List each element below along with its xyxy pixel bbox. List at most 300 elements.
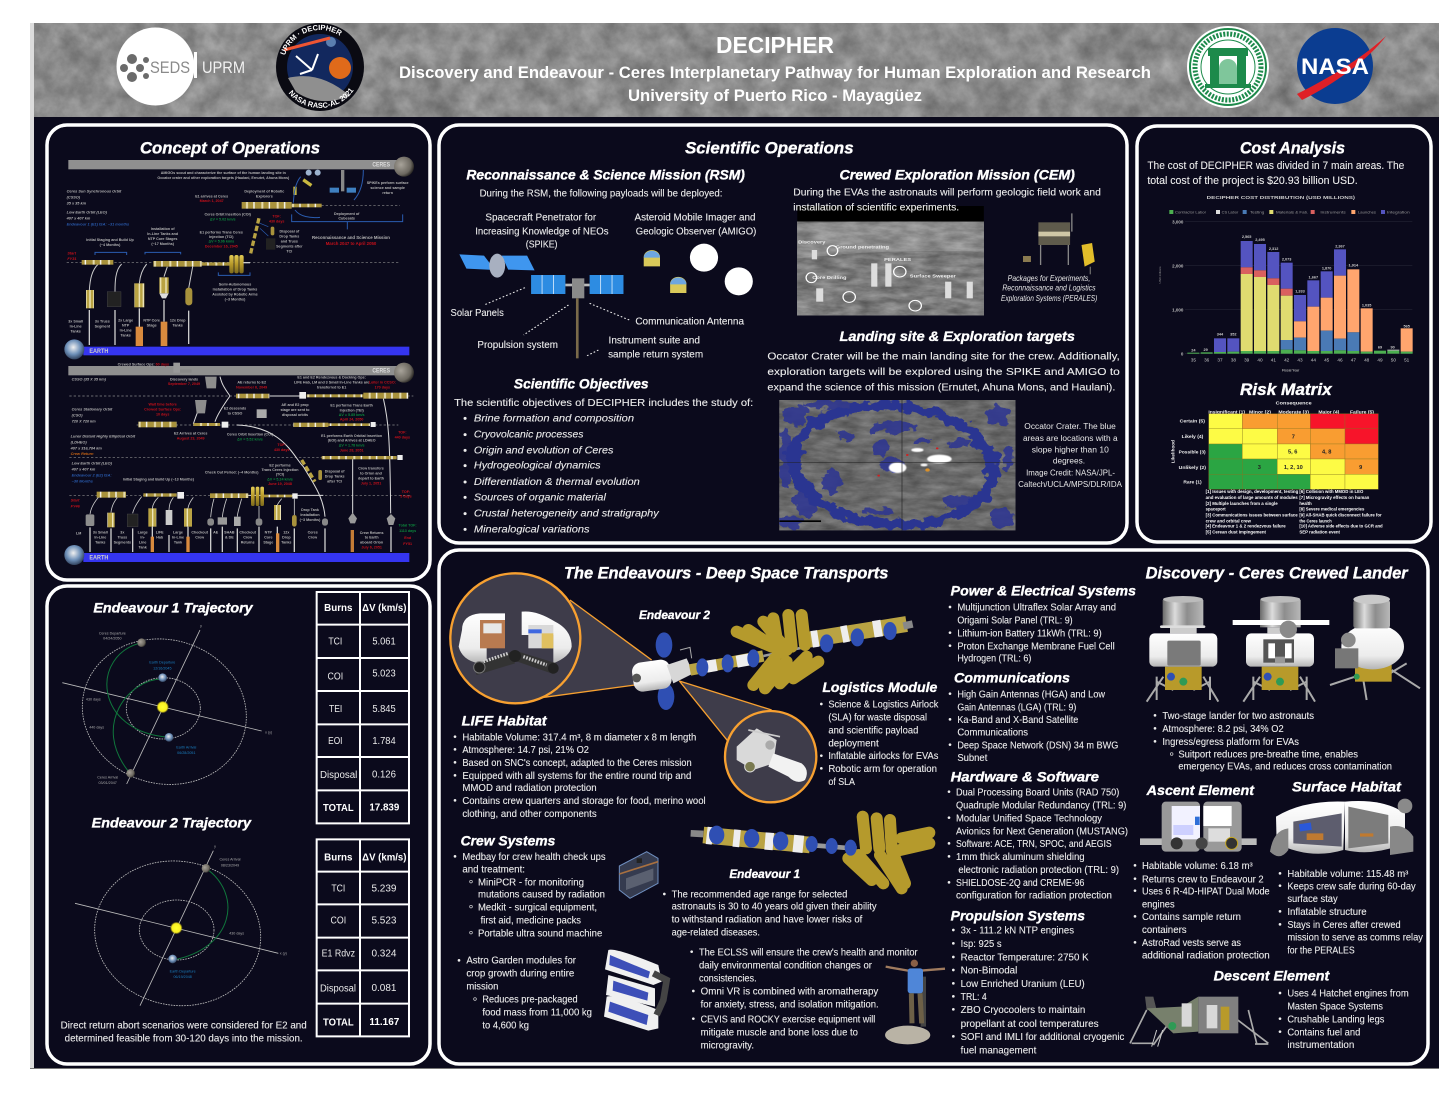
diagram labels: return: Tank bbox=[139, 545, 148, 549]
title text: University of Puerto Rico - Mayagüez bbox=[628, 87, 922, 105]
diagram labels: return: Check Out Period: (~4 Months) bbox=[205, 470, 259, 474]
table: Endeavour 1 burns: TOTAL bbox=[323, 803, 354, 814]
text: crew selection: astronauts is 30 to 40 years old given their ability bbox=[672, 902, 877, 913]
chart: risk matrix grid: 3 bbox=[1258, 465, 1261, 471]
diagram labels: return: Large bbox=[138, 530, 148, 534]
diagram labels: return: Crewed Surface Ops: 60 days bbox=[118, 362, 169, 366]
text: descent element: Uses 4 Hatchet engines from bbox=[1287, 989, 1409, 1000]
diagram labels: outbound: March 2047 to April 2050 bbox=[326, 241, 377, 246]
diagram labels: return: (CSO) bbox=[72, 413, 83, 417]
chart: risk matrix grid: Major (4) bbox=[1318, 409, 1340, 414]
text: propulsion systems: SOFI and IMLI for additional cryogenic bbox=[961, 1032, 1124, 1043]
diagram labels: return: Drop bbox=[282, 535, 291, 539]
title text bbox=[399, 32, 1151, 105]
chart legend: Instruments bbox=[1320, 211, 1346, 215]
table: Endeavour 2 burns: ΔV (km/s) bbox=[362, 852, 406, 863]
bar totals: 69 bbox=[1378, 345, 1382, 349]
text: RSM intro and payloads bbox=[475, 188, 756, 250]
diagram labels: return: to Earth bbox=[365, 536, 379, 540]
diagram labels: return: Drop Tank bbox=[301, 508, 320, 512]
illustration: Discovery lander with suitports bbox=[1233, 596, 1329, 702]
chart: Endeavour 1 orbit diagram: 12/16/2045 bbox=[153, 666, 171, 670]
text: hardware and software: configuration for radiation protection bbox=[956, 891, 1112, 902]
diagram labels: return: April 24, 2050 bbox=[340, 418, 363, 422]
text: RSM intro and payloads: (SPIKE) bbox=[526, 239, 558, 250]
map: Occator Crater slope map bbox=[779, 393, 1016, 537]
diagram labels: return: Crew transfers bbox=[358, 467, 384, 471]
diagram labels: outbound: ΔV = 5.02 km/s bbox=[210, 217, 236, 221]
chart legend: Testing bbox=[1250, 211, 1264, 215]
bar totals: 29 bbox=[1204, 348, 1208, 352]
text: hardware and software: Quadruple Modular Redundancy (TRL: 9) bbox=[956, 800, 1126, 811]
text: risk legend bbox=[1206, 489, 1383, 535]
text: risk legend: spaceport bbox=[1206, 506, 1226, 511]
text: hardware and software: Avionics for Next Generation (MUSTANG) bbox=[956, 826, 1128, 837]
text: EVA description: During the EVAs the astronauts will perform geologic field work and bbox=[793, 187, 1101, 198]
diagram labels: outbound: Occator crater and other exploration targets (Haulani, Ernutet, Ahuna Mons) bbox=[157, 176, 290, 180]
diagram labels: return: Crew Return bbox=[71, 452, 94, 456]
diagram labels: return: 407 x 407 km bbox=[71, 468, 96, 472]
text: RSM intro and payloads: During the RSM, the following payloads will be deployed: bbox=[480, 188, 722, 199]
diagram labels: return: In-Line bbox=[172, 535, 184, 539]
diagram labels: return: 170 days bbox=[375, 385, 390, 389]
panel: concept of operations bbox=[47, 125, 430, 580]
diagram labels: outbound: Deployment of Robotic bbox=[244, 189, 284, 193]
diagram labels: outbound: AMIGOs scout and characterize the surface of the human landing site in bbox=[161, 171, 286, 175]
diagram labels: return: ΔV = 1.78 km/s bbox=[339, 443, 365, 447]
chart: cost distribution stacked bars: DECIPHER COST DISTRIBUTION (USD MILLIONS) bbox=[1207, 195, 1355, 201]
chart: cost distribution stacked bars: 38 bbox=[1231, 357, 1236, 362]
chart: cost distribution stacked bars: 1,000 bbox=[1172, 307, 1184, 312]
chart: risk matrix grid: Likely (4) bbox=[1182, 434, 1204, 439]
caption: Occator Crater: Caltech/UCLA/MPS/DLR/IDA bbox=[1018, 480, 1122, 490]
chart: risk matrix grid: Unlikely (2) bbox=[1179, 465, 1206, 470]
chart: Endeavour 2 orbit diagram: y bbox=[214, 844, 216, 848]
text: risk legend: [2] Multiple launches from a single bbox=[1206, 501, 1278, 506]
bar totals: 1,035 bbox=[1362, 304, 1372, 308]
list: scientific objectives: Crustal heterogeneity and stratigraphy bbox=[474, 508, 660, 519]
diagram labels: return: 5 days bbox=[400, 495, 412, 499]
logo: SEDS UPRM: SEDS bbox=[150, 58, 190, 77]
chart: Endeavour 1 orbit diagram: Earth Arrival bbox=[176, 745, 196, 749]
bar totals: 2,565 bbox=[1242, 235, 1252, 239]
text: LIFE habitat: Equipped with all systems for the entire round trip and bbox=[462, 771, 691, 782]
text: abort scenarios note: determined feasible from 30-120 days into the mission. bbox=[65, 1033, 303, 1044]
text: propulsion systems bbox=[951, 908, 1124, 1056]
bar totals: 2,495 bbox=[1255, 238, 1266, 242]
diagram labels: return: LIFE bbox=[156, 530, 164, 534]
diagram labels: return: (~3 Months) bbox=[300, 518, 321, 522]
text: logistics module: deployment bbox=[828, 738, 879, 749]
diagram labels: return: Ceres Orbit Insertion (COI) bbox=[227, 433, 274, 437]
illustration: Discovery lander isometric bbox=[1330, 595, 1420, 700]
diagram labels: return: Truss bbox=[117, 535, 127, 539]
text: ascent element: Contains sample return bbox=[1142, 912, 1241, 923]
diagram labels: return: In- bbox=[140, 535, 146, 539]
chart: Endeavour 1 orbit diagram: 06/28/2051 bbox=[177, 751, 195, 755]
diagram labels: return: 12x bbox=[283, 530, 289, 534]
text: cost summary bbox=[1147, 160, 1404, 187]
diagram labels: outbound: 3x Small bbox=[68, 320, 83, 324]
chart: cost distribution stacked bars: 46 bbox=[1337, 357, 1343, 362]
chart: Endeavour 1 orbit diagram: 04/24/2050 bbox=[103, 637, 121, 641]
text: risk legend: [9] All-SHAB quick disconnect failure for bbox=[1299, 512, 1382, 517]
text: ascent element: additional radiation protection bbox=[1142, 951, 1270, 962]
text: communications: Ka-Band and X-Band Satellite bbox=[957, 715, 1079, 726]
chart: risk matrix grid: Likelihood bbox=[1170, 440, 1175, 463]
text: ascent element: Returns crew to Endeavour 2 bbox=[1142, 874, 1264, 885]
logo: DECIPHER mission patch: UPRM · DECIPHER bbox=[280, 24, 342, 54]
diagram labels: return: Trans Ceres Injection bbox=[262, 468, 298, 472]
image: crewed surface operations scene: Core Drilling bbox=[812, 276, 847, 281]
diagram labels: outbound: (~4 Months) bbox=[100, 243, 121, 247]
text: hardware and software: electronic radiation protection (TRL: 9) bbox=[958, 865, 1119, 876]
text: LIFE habitat bbox=[454, 713, 706, 820]
diagram labels: outbound: Tanks bbox=[173, 323, 183, 327]
logo: DECIPHER mission patch: NASA RASC-AL 2021 bbox=[288, 88, 354, 108]
list: scientific objectives: Differentiation & thermal evolution bbox=[474, 476, 640, 488]
image: crewed surface operations scene: Ground penetrating bbox=[836, 245, 889, 250]
diagram labels: outbound: (~3 Months) bbox=[225, 297, 246, 301]
text: LIFE habitat: clothing, and other components bbox=[462, 809, 597, 820]
diagram labels: outbound: Cubesats bbox=[338, 216, 355, 220]
diagram labels: return: Checkout bbox=[191, 530, 209, 534]
title text: Discovery and Endeavour - Ceres Interplanetary Pathway for Human Exploration and Research bbox=[399, 64, 1151, 82]
text: logistics module: Logistics Module bbox=[822, 679, 938, 695]
table: Endeavour 2 burns: TOTAL bbox=[323, 1017, 354, 1028]
diagram labels: outbound: Installation of Drop Tanks bbox=[213, 287, 257, 291]
chart: risk matrix grid: Certain (5) bbox=[1180, 419, 1205, 424]
chart: cost distribution stacked bars: 44 bbox=[1311, 357, 1316, 362]
diagram: outbound Endeavour 1 sequence: EARTH bbox=[89, 349, 108, 355]
text: Discovery overview: emergency EVAs, and reduces cross contamination bbox=[1178, 762, 1392, 773]
heading: The Endeavours: The Endeavours - Deep Space Transports bbox=[564, 563, 888, 582]
text: risk legend: and evaluation of large amounts of modules bbox=[1206, 495, 1298, 500]
chart: risk matrix grid: 5, 6 bbox=[1288, 450, 1297, 456]
panel: Endeavours and Discovery bbox=[439, 550, 1428, 1064]
text: risk legend: health bbox=[1299, 501, 1312, 506]
diagram labels: return: July 6, 2051 bbox=[361, 545, 382, 549]
diagram labels: return: Installation bbox=[300, 513, 320, 517]
caption: Occator Crater: slope higher than 10 bbox=[1032, 445, 1109, 455]
chart: risk matrix grid: 4, 8 bbox=[1322, 450, 1331, 456]
caption: Occator Crater: degrees. bbox=[1053, 456, 1085, 466]
diagram labels: return: Discovery lands bbox=[170, 377, 198, 381]
text: risk legend: [3] Communications issues between surface bbox=[1206, 512, 1298, 517]
chart: Endeavour 1 orbit diagram: 440 days bbox=[89, 726, 104, 730]
diagram labels: outbound: Deployment of bbox=[334, 212, 360, 216]
text: crew selection: The recommended age range for selected bbox=[672, 890, 847, 901]
text: abort scenarios note: Direct return abort scenarios were considered for E2 and bbox=[61, 1020, 307, 1031]
diagram labels: return: stage are sent to bbox=[280, 408, 310, 412]
caption: PERALES: Exploration Systems (PERALES) bbox=[1001, 294, 1097, 303]
diagram labels: return: LIFE Hab, LM and 3 Small In-Line Tanks are bbox=[294, 381, 369, 385]
text: crew systems: Medbay for crew health check ups bbox=[462, 852, 606, 863]
diagram: outbound Endeavour 1 sequence: CERES bbox=[372, 162, 390, 168]
chart: cost distribution stacked bars: 49 bbox=[1377, 357, 1383, 362]
text: propulsion systems: Propulsion Systems bbox=[951, 908, 1085, 924]
text: Discovery overview: Ingress/egress platform for EVAs bbox=[1162, 737, 1299, 748]
text: crew systems: first aid, medicine packs bbox=[481, 916, 581, 927]
diagram labels: return: ΔV = 5.52 km/s bbox=[237, 437, 263, 441]
chart: cost distribution stacked bars: 41 bbox=[1271, 357, 1276, 362]
text: surface habitat: Keeps crew safe during 60-day bbox=[1287, 881, 1416, 892]
heading: Endeavour 2: Endeavour 2 bbox=[639, 608, 710, 622]
diagram labels: return: Disposal of bbox=[325, 470, 345, 474]
text: logistics module: Science & Logistics Airlock bbox=[828, 700, 938, 711]
callout: logistics module bbox=[679, 681, 816, 802]
text: hardware and software: Hardware & Software bbox=[951, 769, 1099, 785]
text: RSM intro and payloads: Geologic Observer (AMIGO) bbox=[636, 226, 756, 237]
chart: cost distribution stacked bars: 43 bbox=[1297, 357, 1303, 362]
diagram labels: outbound: NTP Core Stages bbox=[148, 237, 177, 241]
heading: surface habitat: Surface Habitat bbox=[1292, 779, 1402, 795]
diagram labels: return: E2 performs bbox=[269, 463, 291, 467]
diagram labels: outbound: 12x Drop bbox=[170, 318, 186, 322]
text: Discovery overview: Two-stage lander for two astronauts bbox=[1162, 711, 1314, 722]
text: ECLSS and wellbeing: daily environmental condition changes or bbox=[699, 960, 873, 971]
diagram labels: return: aboard Orion bbox=[360, 540, 383, 544]
logo: NASA meatball: NASA bbox=[1301, 54, 1369, 79]
table: Endeavour 1 burns: COI bbox=[327, 671, 343, 682]
diagram labels: return: E2 Arrives at Ceres bbox=[174, 432, 207, 436]
logo: SEDS UPRM: UPRM bbox=[202, 58, 245, 77]
caption: Occator Crater: areas are locations with a bbox=[1023, 434, 1118, 444]
chart: cost distribution stacked bars: 45 bbox=[1324, 357, 1330, 362]
bar totals: 1,333 bbox=[1295, 289, 1305, 293]
illustration: surface habitat cutaway bbox=[1270, 799, 1413, 856]
text: communications: Gain Antennas (LGA) (TRL: 9) bbox=[957, 702, 1076, 713]
text: descent element: Crushable Landing legs bbox=[1287, 1014, 1384, 1025]
text: descent element: Contains fuel and bbox=[1287, 1027, 1360, 1038]
text: SPIKE part labels: sample return system bbox=[608, 349, 703, 360]
text: risk legend: [7] Microgravity effects on human bbox=[1299, 495, 1370, 500]
text: astro garden: crop growth during entire bbox=[466, 969, 575, 980]
table: Endeavour 1 burns: 5.061 bbox=[372, 637, 396, 648]
diagram labels: return: Injection (TEI) bbox=[340, 408, 365, 412]
diagram labels: return: End bbox=[404, 536, 411, 540]
text: propulsion systems: Non-Bimodal bbox=[961, 966, 1017, 977]
table: Endeavour 1 burns: 17.839 bbox=[369, 802, 400, 813]
text: LIFE habitat: Habitable Volume: 317.4 m³, 8 m diameter x 8 m length bbox=[462, 732, 696, 743]
diagram labels: return: SHAB bbox=[224, 530, 235, 534]
diagram labels: outbound: E1 performs Trans Ceres bbox=[200, 230, 243, 234]
diagram labels: outbound: Reconnaissance and Science Mission bbox=[312, 235, 390, 240]
illustration: Endeavour 1 spacecraft bbox=[691, 817, 929, 888]
chart: cost distribution stacked bars: 42 bbox=[1284, 357, 1290, 362]
text: ECLSS and wellbeing: consistencies. bbox=[699, 973, 757, 984]
text: surface habitat bbox=[1279, 869, 1423, 957]
diagram labels: return: to Orion and bbox=[360, 472, 382, 476]
list: scientific objectives: Origin and evolution of Ceres bbox=[474, 445, 614, 456]
diagram labels: return bbox=[70, 362, 417, 549]
text: logistics module: and scientific payload bbox=[828, 725, 918, 736]
diagram labels: return: Crewed Surface Ops: bbox=[144, 407, 181, 411]
diagram labels: return: Core bbox=[264, 535, 273, 539]
text: ECLSS and wellbeing: mitigate muscle and bone loss due to bbox=[701, 1027, 858, 1038]
text: risk legend: [6] Collision with MMOD in LEO bbox=[1299, 489, 1364, 494]
text: Discovery overview: Atmosphere: 8.2 psi, 34% O2 bbox=[1162, 724, 1284, 735]
chart: cost distribution stacked bars: Fiscal Year bbox=[1282, 368, 1300, 372]
diagram labels: return: 430 days bbox=[274, 448, 289, 452]
text: ascent element: engines bbox=[1142, 899, 1175, 910]
diagram labels: return: (LDHEO) bbox=[71, 440, 87, 444]
heading: Discovery lander: Discovery - Ceres Crewed Lander bbox=[1146, 563, 1409, 582]
chart: Endeavour 1 orbit diagram: Ceres Departure bbox=[99, 632, 126, 636]
text: risk legend: [4] Endeavour 1 & 2 rendezvous failure bbox=[1206, 524, 1286, 529]
diagram labels: return: Tanks bbox=[95, 540, 105, 544]
text: ascent element: AstroRad vests serve as bbox=[1142, 938, 1241, 949]
diagram labels: return: Tank bbox=[174, 540, 183, 544]
text: descent element: instrumentation bbox=[1287, 1040, 1354, 1051]
diagram labels: return: Crew bbox=[243, 535, 252, 539]
text: communications: Communications bbox=[957, 727, 1028, 738]
table: Endeavour 1 burns: Disposal bbox=[320, 770, 357, 781]
text: crew systems: mutations caused by radiation bbox=[478, 890, 605, 901]
chart: risk matrix grid: Moderate (3) bbox=[1278, 409, 1309, 414]
bar totals: 24 bbox=[1191, 348, 1196, 352]
text: hardware and software: Modular Unified Space Technology bbox=[956, 813, 1102, 824]
diagram labels: return: depart to Earth bbox=[358, 477, 384, 481]
text: LIFE habitat: Based on SNC's concept, adapted to the Ceres mission bbox=[462, 758, 692, 769]
diagram labels: return: Initial Staging and Build Up (~13 Months) bbox=[123, 477, 195, 481]
text: logistics module bbox=[820, 679, 938, 788]
diagram labels: outbound: TCI bbox=[286, 250, 292, 254]
diagram labels: outbound: 2x Large bbox=[118, 318, 133, 322]
text: LIFE habitat: Atmosphere: 14.7 psi, 21% O2 bbox=[462, 745, 589, 756]
text: RSM intro and payloads: Spacecraft Penetrator for bbox=[485, 212, 596, 223]
diagram labels: return: 407 x 316,784 km bbox=[70, 446, 102, 450]
diagram labels: return: Checkout bbox=[239, 530, 257, 534]
diagram labels: return: E1 performs Earth Orbital Insertion bbox=[321, 434, 382, 438]
chart: Endeavour 2 orbit diagram: x (γ) bbox=[280, 952, 287, 956]
text: power and electrical systems: Lithium-ion Battery 11kWh (TRL: 9) bbox=[957, 628, 1102, 639]
diagram labels: return: disposal orbits bbox=[282, 413, 308, 417]
bar totals: 565 bbox=[1403, 324, 1411, 328]
illustration: PERALES packages bbox=[1023, 213, 1095, 274]
chart legend: Contractor Labor bbox=[1175, 211, 1207, 215]
bar totals: 344 bbox=[1217, 332, 1224, 336]
text: hardware and software: Software: ACE, TRN, SPOC, and AEGIS bbox=[956, 839, 1112, 850]
diagram labels: outbound: NTP Core bbox=[143, 318, 160, 322]
diagram: return and Endeavour 2 sequence: EARTH bbox=[89, 555, 108, 561]
text: ECLSS and wellbeing: for anxiety, stress, and isolation mitigation. bbox=[701, 1000, 879, 1011]
chart legend: Integration bbox=[1387, 211, 1410, 215]
text: descent element bbox=[1279, 989, 1409, 1051]
text: surface habitat: Habitable volume: 115.48 m³ bbox=[1287, 869, 1409, 880]
diagram labels: return: Ceres Stationary Orbit bbox=[72, 407, 113, 411]
table: Endeavour 2 burns: Disposal bbox=[320, 984, 356, 995]
diagram labels: outbound: SPIKEs perform surface bbox=[367, 181, 409, 185]
text: astro garden: Astro Garden modules for bbox=[466, 956, 577, 967]
text: astro garden: mission bbox=[466, 982, 498, 993]
diagram labels: outbound: 430 days bbox=[269, 219, 284, 223]
diagram labels: outbound: TOF: bbox=[272, 214, 281, 218]
diagram labels: return: November 6, 2049 bbox=[236, 385, 267, 389]
chart: risk matrix grid: Failure (5) bbox=[1350, 409, 1374, 414]
heading: landing site: Landing site & Exploration targets bbox=[840, 329, 1075, 344]
illustration: AMIGO hoppers bbox=[644, 244, 753, 295]
diagram labels: return: E2 descends bbox=[224, 407, 246, 411]
diagram labels: outbound: Ceres Orbit Insertion (COI) bbox=[205, 212, 252, 216]
logo: SEDS UPRM bbox=[116, 28, 245, 106]
diagram labels: return: 720 X 720 km bbox=[72, 419, 96, 423]
diagram labels: return: LM bbox=[76, 531, 81, 535]
caption: Occator Crater bbox=[1018, 422, 1122, 490]
panel: trajectories bbox=[47, 586, 430, 1064]
text: landing site description: exploration targets will be explored using the SPIKE and AMIGO to bbox=[767, 366, 1120, 378]
table: Endeavour 2 burns: COI bbox=[330, 916, 346, 927]
diagram labels: outbound: Installation of bbox=[151, 227, 175, 231]
text: EVA description bbox=[793, 187, 1101, 213]
bar totals bbox=[1191, 235, 1411, 352]
chart: cost distribution stacked bars: 51 bbox=[1404, 357, 1410, 362]
diagram labels: return: Start bbox=[71, 498, 80, 502]
table: Endeavour 2 burns: E1 Rdvz bbox=[322, 948, 355, 959]
text: ECLSS and wellbeing bbox=[690, 947, 918, 1051]
chart: Endeavour 2 orbit diagram: 430 days bbox=[229, 932, 244, 936]
chart legend: Materials & Fab. bbox=[1276, 211, 1308, 215]
chart: cost distribution stacked bars: 0 bbox=[1181, 351, 1184, 356]
diagram labels: outbound: Injection (TCI) bbox=[209, 235, 234, 239]
diagram labels: return: NTP bbox=[265, 530, 273, 534]
diagram: outbound Endeavour 1 sequence bbox=[64, 157, 414, 359]
text: RSM intro and payloads: Increasing Knowledge of NEOs bbox=[475, 226, 609, 237]
text: surface habitat: mission to serve as comms relay bbox=[1287, 933, 1423, 944]
callout: habitat cross-section bbox=[450, 573, 652, 703]
table: Endeavour 2 burns: 5.239 bbox=[371, 884, 397, 895]
diagram labels: return: (EOI) and Arrives at LDHEO bbox=[328, 439, 376, 443]
text: crew systems bbox=[454, 832, 606, 939]
text: ECLSS and wellbeing: Omni VR is combined with aromatherapy bbox=[701, 987, 878, 998]
table: Endeavour 2 burns: Burns bbox=[324, 852, 353, 863]
diagram labels: outbound: Disposal of bbox=[279, 230, 300, 234]
caption: PERALES bbox=[1001, 274, 1097, 303]
caption: Occator Crater: Occator Crater. The blue bbox=[1024, 422, 1116, 432]
text: LIFE habitat: MMOD and radiation protection bbox=[462, 783, 597, 794]
heading: concept of operations: Concept of Operations bbox=[140, 138, 320, 157]
diagram labels: return: June 28, 2051 bbox=[340, 448, 364, 452]
chart: Endeavour 2 orbit diagram bbox=[75, 844, 287, 1019]
diagram labels: return: Drop Tanks bbox=[325, 474, 345, 478]
text: risk legend: [1] Issues with design, development, testing bbox=[1206, 489, 1299, 494]
header banner bbox=[34, 23, 1439, 117]
title text: DECIPHER bbox=[716, 32, 834, 58]
text: propulsion systems: Reactor Temperature: 2750 K bbox=[961, 953, 1089, 964]
text: astro garden: to 4,600 kg bbox=[482, 1021, 529, 1032]
table: Endeavour 1 burns: EOI bbox=[328, 736, 342, 747]
diagram labels: outbound: Ceres Sun Synchronous Orbit bbox=[67, 189, 122, 193]
diagram labels: return: 3x Small bbox=[93, 530, 108, 534]
table: Endeavour 2 burns: 0.081 bbox=[371, 983, 397, 994]
text: hardware and software: 1mm thick aluminum shielding bbox=[956, 852, 1085, 863]
list: scientific objectives: Brine formation and composition bbox=[474, 413, 634, 424]
chart: cost distribution stacked bars: 3,000 bbox=[1172, 219, 1184, 224]
table: Endeavour 1 burns bbox=[317, 592, 409, 823]
text: propulsion systems: propellant at cool temperatures bbox=[961, 1019, 1099, 1030]
chart: risk matrix grid: Minor (2) bbox=[1249, 409, 1271, 414]
text: cost summary: The cost of DECIPHER was divided in 7 main areas. The bbox=[1147, 160, 1404, 172]
diagram labels: outbound: (CSSO) bbox=[67, 195, 81, 199]
chart: cost distribution stacked bars: 40 bbox=[1257, 357, 1263, 362]
diagram labels: outbound: Semi-Autonomous bbox=[219, 283, 251, 287]
diagram labels: return: In-Line bbox=[94, 535, 106, 539]
icon: medbay kit bbox=[619, 852, 658, 898]
diagram labels: return: June 19, 2048 bbox=[268, 482, 292, 486]
diagram labels: return: July 1, 2051 bbox=[361, 482, 381, 486]
image: crewed surface operations scene: Discovery bbox=[798, 240, 826, 245]
chart: risk matrix grid: Insignificant (1) bbox=[1208, 409, 1245, 414]
